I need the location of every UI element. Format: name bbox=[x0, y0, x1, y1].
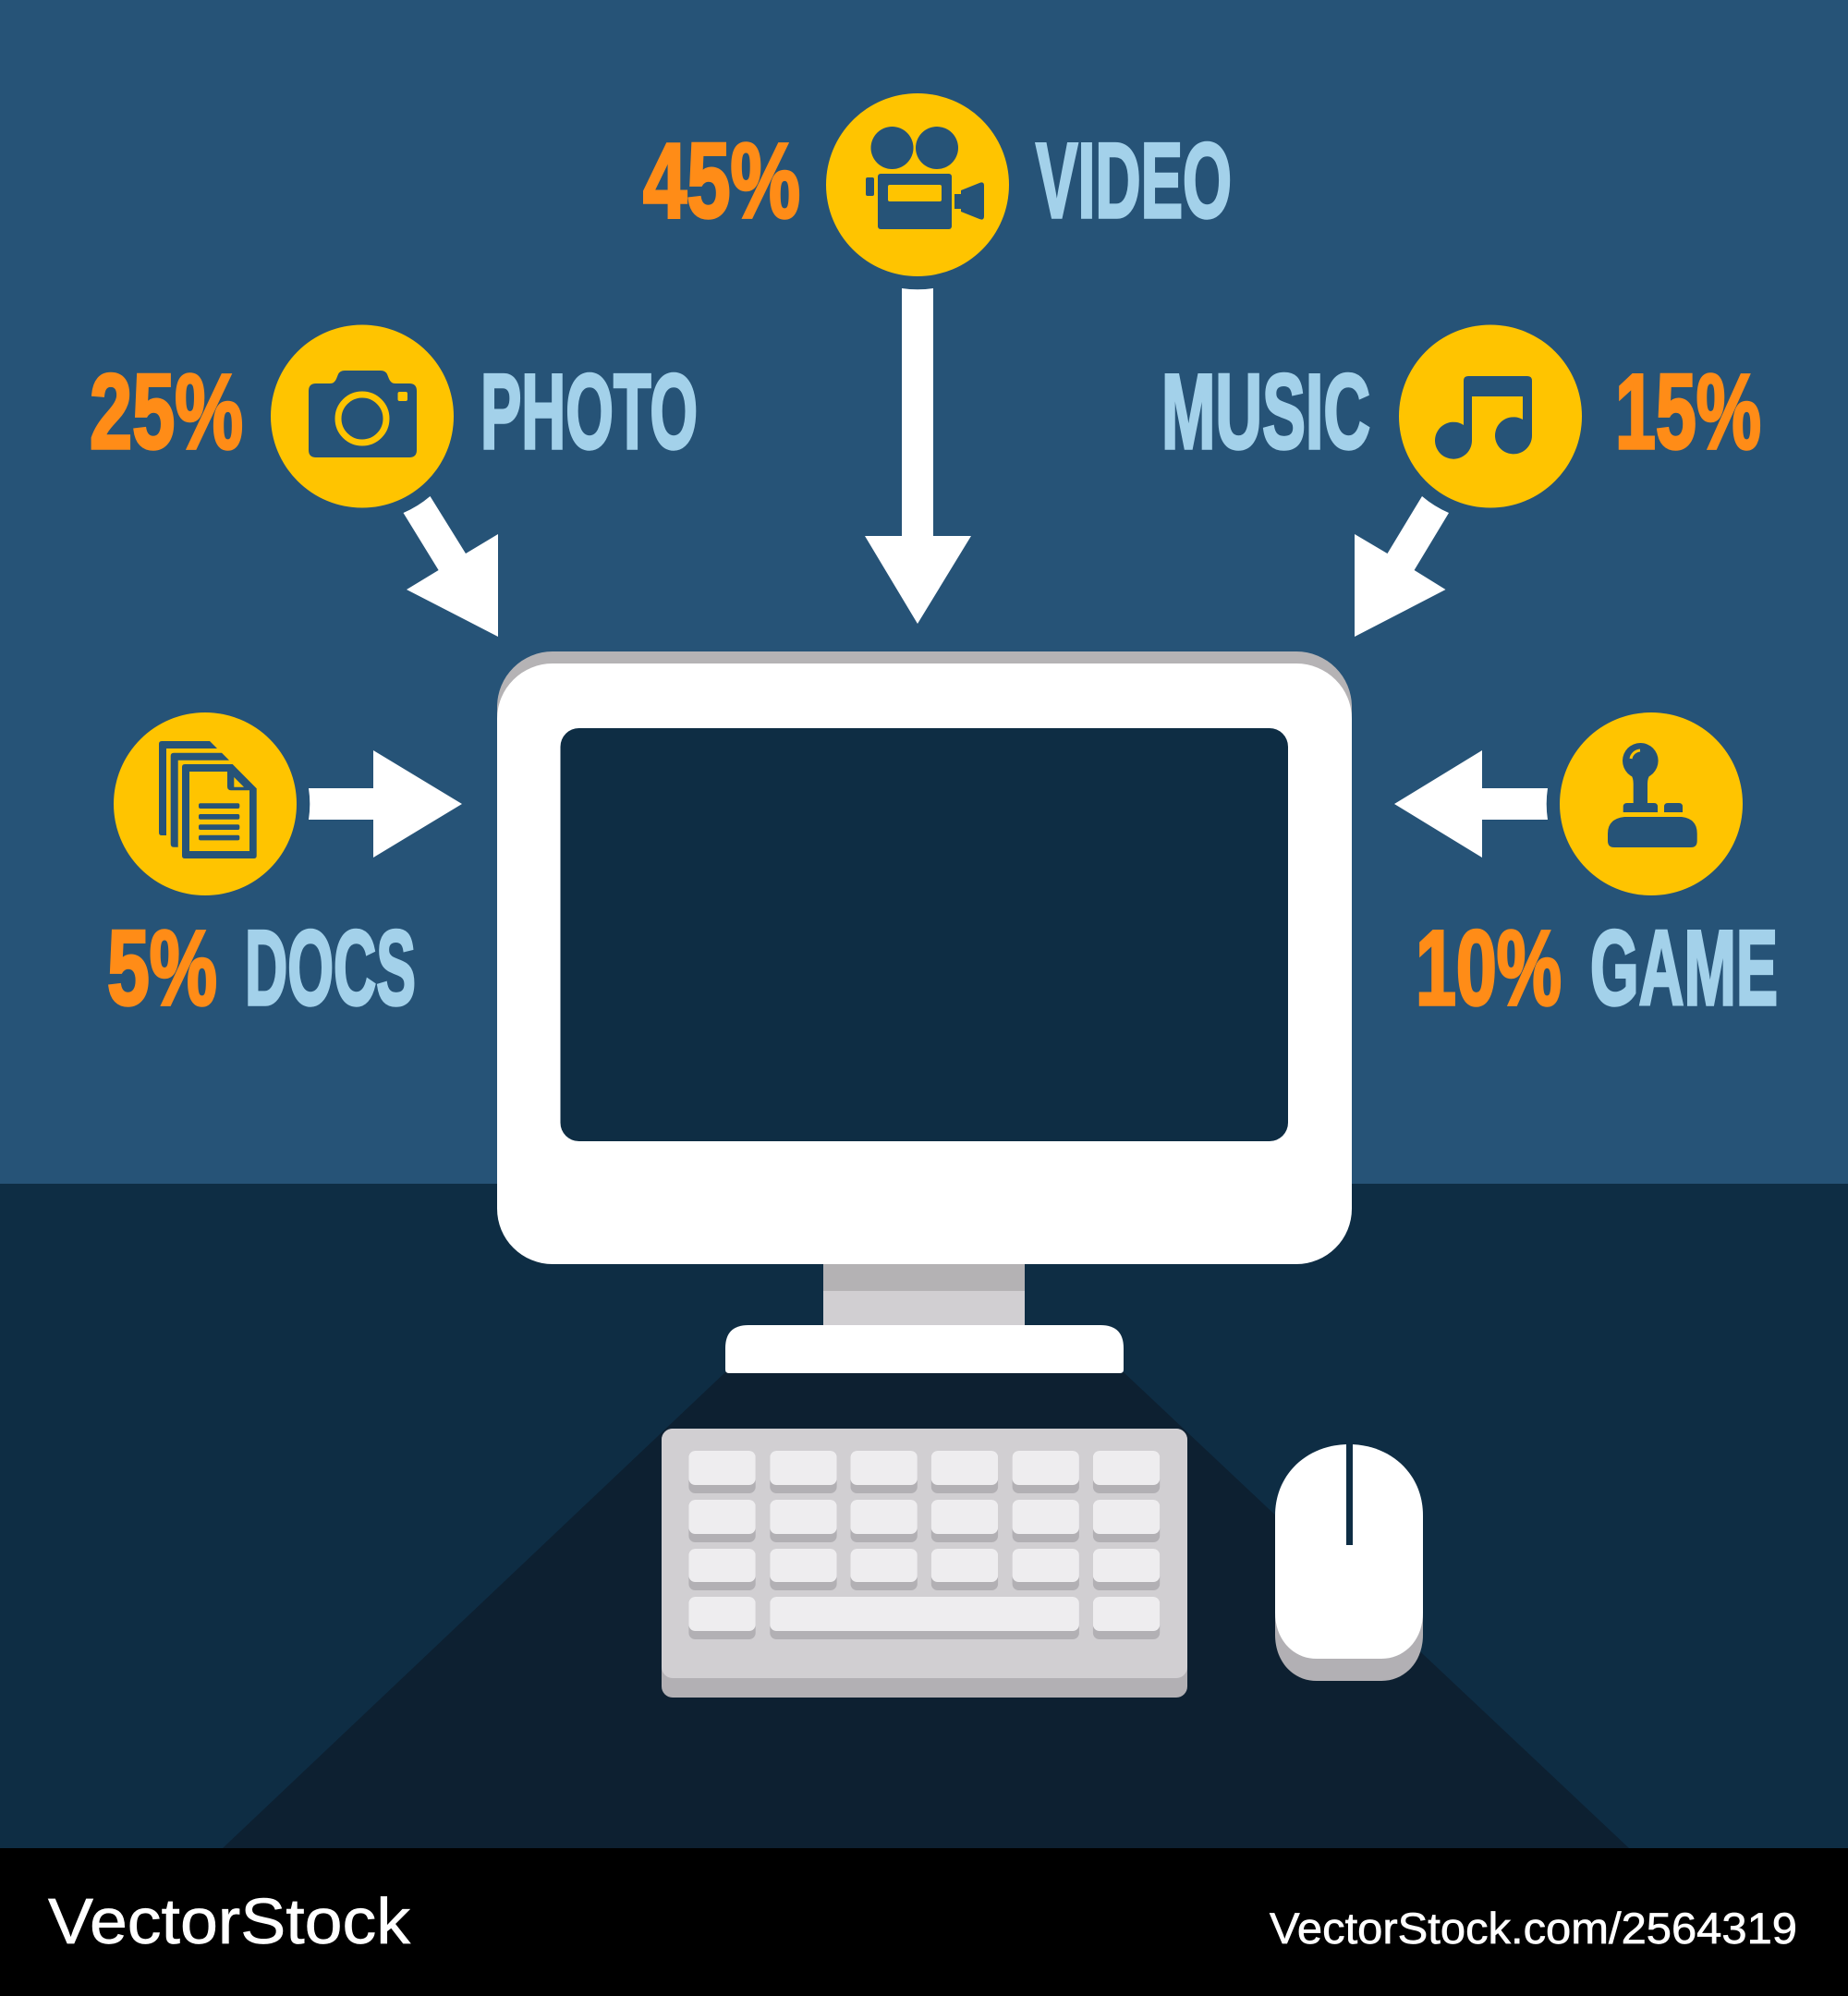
background wall bbox=[0, 0, 1848, 1184]
music badge icon bbox=[1399, 325, 1582, 508]
photo percentage: 25% bbox=[90, 353, 243, 471]
photo label: PHOTO bbox=[480, 353, 698, 471]
photo arrow bbox=[403, 496, 498, 637]
monitor bbox=[497, 651, 1352, 1264]
photo badge icon bbox=[271, 325, 454, 508]
mouse bbox=[1275, 1444, 1423, 1681]
footer bar bbox=[0, 1848, 1848, 1996]
game arrow bbox=[1394, 750, 1548, 858]
desk bbox=[0, 1184, 1848, 1848]
docs label: DOCS bbox=[245, 909, 416, 1028]
panel: photo bbox=[90, 325, 698, 637]
footer brand: VectorStock bbox=[48, 1885, 411, 1957]
game badge icon bbox=[1560, 712, 1743, 895]
video label: VIDEO bbox=[1036, 122, 1232, 240]
music label: MUSIC bbox=[1161, 353, 1370, 471]
desk shadow bbox=[223, 1372, 1629, 1848]
panel: game bbox=[1394, 712, 1778, 1028]
panel: video bbox=[643, 93, 1232, 624]
panel: docs bbox=[107, 712, 462, 1028]
video badge icon bbox=[826, 93, 1009, 276]
keyboard bbox=[662, 1429, 1187, 1698]
docs badge icon bbox=[114, 712, 297, 895]
music percentage: 15% bbox=[1615, 353, 1761, 471]
monitor stand bbox=[725, 1264, 1124, 1373]
video percentage: 45% bbox=[643, 122, 800, 240]
footer url: VectorStock.com/2564319 bbox=[1270, 1904, 1797, 1953]
game percentage: 10% bbox=[1416, 909, 1562, 1028]
docs arrow bbox=[309, 750, 462, 858]
panel: music bbox=[1161, 325, 1761, 637]
monitor screen bbox=[560, 728, 1288, 1141]
keys bbox=[688, 1451, 1160, 1639]
docs percentage: 5% bbox=[107, 909, 217, 1028]
video arrow bbox=[865, 288, 971, 624]
music arrow bbox=[1355, 496, 1449, 637]
